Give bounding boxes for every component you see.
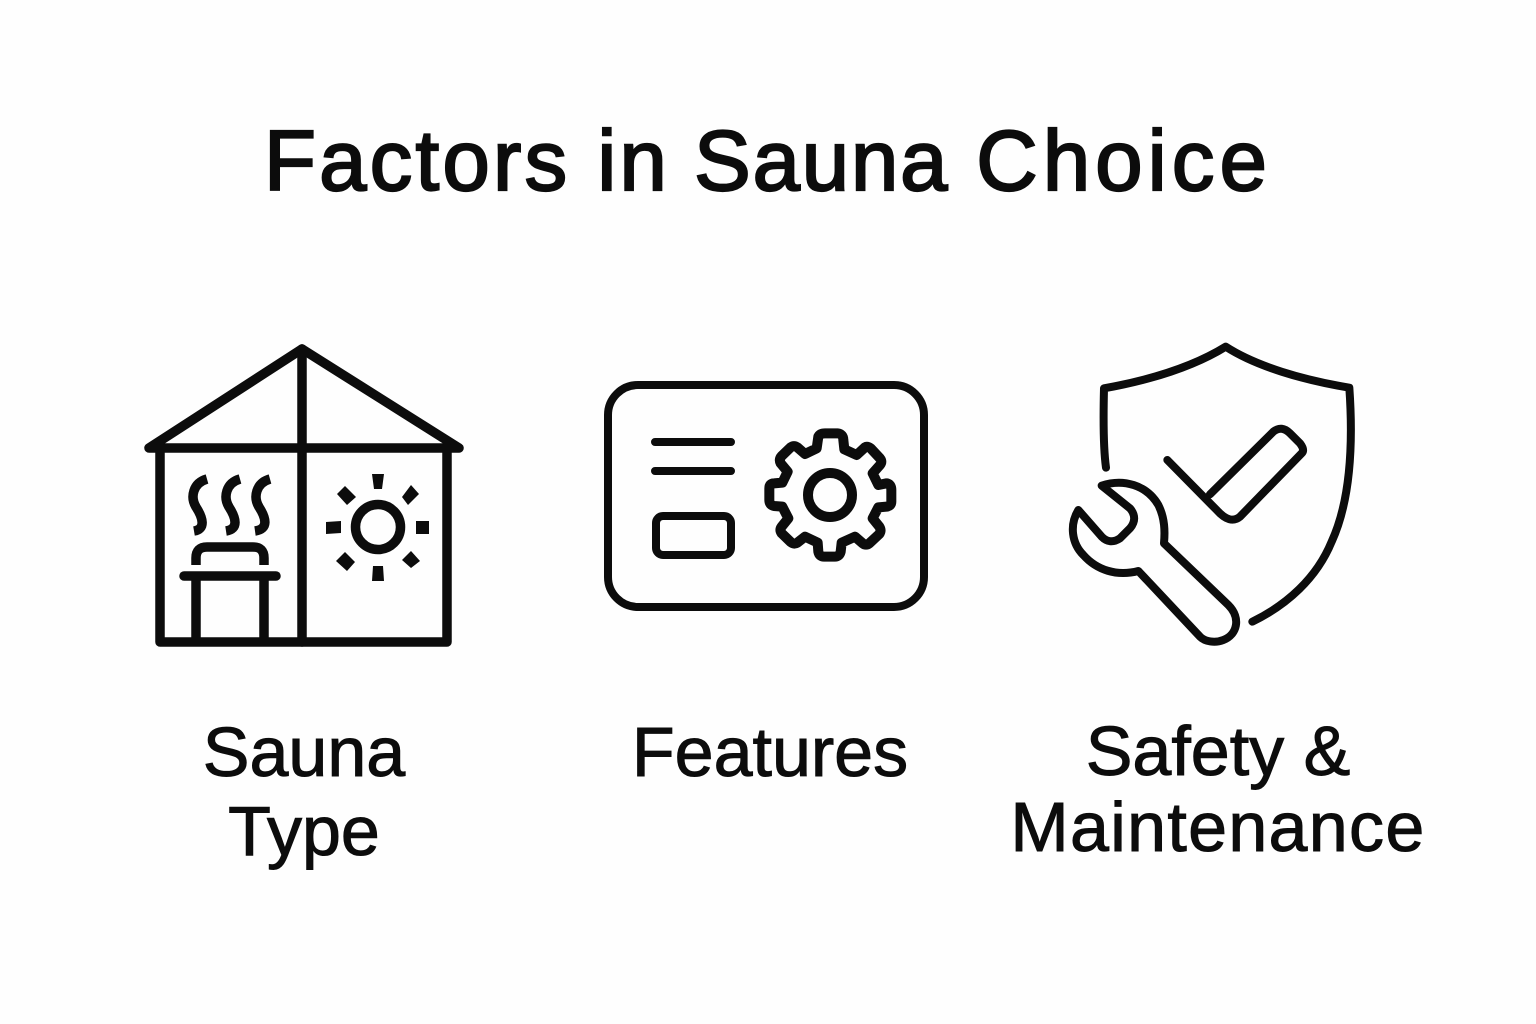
- label: Safety and Maintenance: Maintenance: [1010, 788, 1426, 866]
- icon: shield with check and wrench: [1073, 347, 1351, 642]
- label: Sauna Type: [203, 713, 406, 870]
- label: Sauna Type: Sauna: [203, 713, 405, 791]
- icon: sauna house: [149, 349, 459, 642]
- icon: control panel with gear: [608, 385, 924, 607]
- title: Factors in Sauna Choice: [264, 114, 1272, 209]
- label: Features: Features: [632, 713, 908, 791]
- label: Sauna Type: Type: [228, 792, 380, 870]
- label: Safety and Maintenance: Safety &: [1086, 712, 1350, 790]
- label: Safety and Maintenance: [1010, 712, 1426, 866]
